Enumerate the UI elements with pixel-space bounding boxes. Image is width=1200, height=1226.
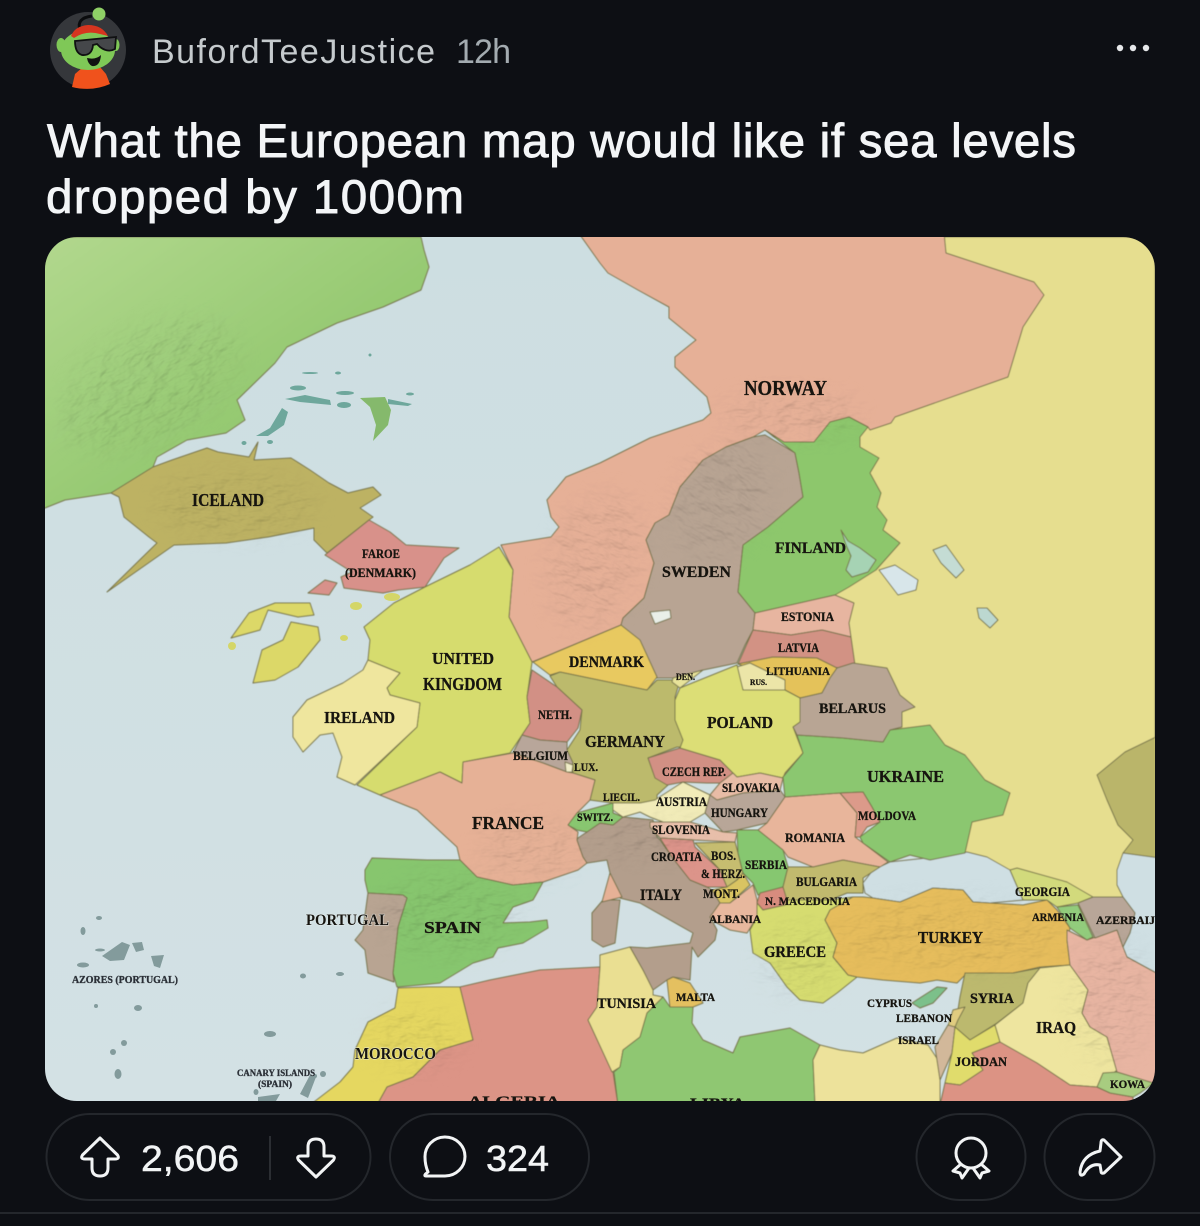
label: Turkey: TURKEY (918, 928, 983, 947)
title: What the European map would like if sea levels (47, 115, 1076, 168)
label: Switzerland: SWITZ. (577, 810, 613, 824)
islands: Arctic archipelago (242, 354, 414, 445)
label: Cyprus: CYPRUS (867, 996, 912, 1010)
country: Morocco (310, 987, 473, 1105)
label: Iraq: IRAQ (1036, 1018, 1076, 1037)
label: Slovenia: SLOVENIA (652, 822, 711, 837)
label: Sweden: SWEDEN (662, 564, 731, 581)
country: Lithuania (738, 657, 837, 698)
icon: comment bubble (425, 1137, 465, 1176)
label: Portugal: PORTUGAL (306, 912, 389, 929)
country: Poland (675, 665, 803, 778)
sea: Black Sea (863, 852, 1023, 903)
country: Austria (613, 782, 710, 822)
country: Azerbaijan (1078, 897, 1135, 947)
island: Sardinia (592, 900, 620, 947)
island: Corsica (602, 873, 622, 902)
country: Croatia (660, 838, 727, 887)
country: Lebanon (948, 1007, 965, 1027)
country: Luxembourg (565, 762, 573, 772)
country: Israel (935, 1025, 955, 1080)
icon: share arrow (1080, 1140, 1121, 1175)
country: Jordan (945, 1025, 1000, 1085)
label: Luxembourg: LUX. (574, 760, 598, 774)
label: Slovakia: SLOVAKIA (722, 780, 781, 795)
country: Saudi Arabia (940, 1042, 1133, 1105)
country: Slovakia (710, 773, 783, 800)
label: Italy: ITALY (640, 887, 682, 904)
land: Greenland (40, 237, 429, 510)
label: Albania: ALBANIA (709, 912, 761, 926)
islands: Azores (77, 916, 344, 1101)
label: Ukraine: UKRAINE (867, 767, 944, 786)
country: France (380, 753, 595, 885)
country: Serbia (737, 830, 788, 895)
map panel (40, 232, 1160, 1112)
label: Montenegro: MONT. (703, 886, 740, 901)
country: Cyprus (912, 987, 947, 1008)
island: northwest yellow (231, 603, 314, 638)
country: Kaliningrad (737, 663, 785, 690)
icon: upvote arrow (82, 1138, 118, 1176)
country: Spain (365, 858, 548, 987)
country: Iraq (995, 965, 1117, 1087)
label: Morocco: MOROCCO (355, 1044, 436, 1063)
award button (916, 1114, 1026, 1200)
label: Faroe: FAROE (362, 546, 400, 561)
label: Belarus: BELARUS (819, 701, 886, 717)
label: Norway: NORWAY (744, 376, 827, 400)
label: Netherlands: NETH. (538, 707, 572, 722)
country: Estonia (753, 595, 854, 637)
land masses (40, 232, 1160, 1105)
country: Bosnia and Herzegovina (695, 842, 743, 887)
country: Italy (577, 817, 720, 990)
country: Iceland (107, 442, 381, 592)
label: Bosnia: BOS. (711, 848, 736, 863)
label: Jordan: JORDAN (955, 1054, 1008, 1069)
icon: award ribbon (953, 1138, 989, 1178)
label: Belgium: BELGIUM (513, 748, 568, 763)
country: Algeria (377, 967, 618, 1105)
lake: Sweden (650, 610, 671, 624)
country: Egypt (813, 1038, 940, 1105)
country: Albania (710, 885, 757, 933)
label: Armenia: ARMENIA (1032, 910, 1084, 924)
country: Libya (614, 997, 820, 1105)
label: Canary Islands: CANARY ISLANDS (237, 1068, 315, 1078)
country: Moldova (840, 792, 880, 837)
country: Armenia (1057, 905, 1093, 940)
label: France: FRANCE (472, 813, 544, 833)
country: Faroe (325, 520, 459, 593)
label: Estonia: ESTONIA (781, 609, 835, 624)
country: Switzerland (568, 803, 623, 832)
label: Denmark: DENMARK (569, 654, 644, 671)
label: Algeria: ALGERIA (468, 1094, 560, 1110)
country: Finland (738, 417, 900, 613)
country: Greece (750, 897, 857, 1003)
label: Finland: FINLAND (775, 540, 846, 557)
icon: downvote arrow (298, 1139, 334, 1177)
country: Denmark islet (672, 670, 703, 688)
country: Portugal (355, 893, 407, 982)
post age: 12h (456, 33, 511, 71)
country: Latvia (738, 630, 855, 668)
label: Kuwait: KOWA (1110, 1077, 1145, 1091)
country: Malta (667, 977, 703, 1007)
country: Bulgaria (783, 860, 880, 900)
country: Belgium (513, 735, 573, 772)
country: Kuwait (1097, 1072, 1155, 1097)
username: BufordTeeJustice (152, 33, 435, 71)
label: Germany: GERMANY (585, 732, 665, 751)
sea: Caspian (1116, 852, 1155, 972)
country: United Kingdom (357, 547, 532, 795)
sea (45, 237, 1155, 1101)
country: Ireland (293, 660, 420, 785)
country: Czech Republic (648, 748, 733, 785)
label: Lebanon: LEBANON (896, 1011, 952, 1025)
label: Herzegovina: & HERZ. (701, 866, 745, 881)
label: Greece: GREECE (764, 944, 826, 961)
label: (Denmark): (DENMARK) (345, 565, 416, 580)
label: Austria: AUSTRIA (656, 794, 708, 809)
title: dropped by 1000m (46, 171, 464, 224)
label: Libya: LIBYA (690, 1096, 745, 1112)
share button (1044, 1114, 1154, 1200)
country: Kazakhstan (1097, 735, 1160, 860)
label: Kingdom: KINGDOM (423, 674, 502, 694)
country: Norway (501, 232, 1044, 662)
label: Lithuania: LITHUANIA (766, 664, 830, 678)
country: Iran (1067, 930, 1160, 1085)
icon: more menu (1117, 45, 1149, 51)
islands: small north Atlantic (228, 593, 400, 650)
country: Denmark (533, 625, 657, 690)
label: Canary Islands owner: (SPAIN) (258, 1079, 292, 1089)
title (46, 115, 1076, 224)
country: Ukraine (783, 725, 1010, 862)
label: Latvia: LATVIA (778, 640, 819, 655)
island: west yellow (253, 622, 320, 683)
island groups (77, 354, 414, 1101)
label: Malta: MALTA (676, 990, 715, 1004)
label: Israel: ISRAEL (898, 1033, 939, 1047)
country: Romania (758, 793, 888, 867)
mountain relief (40, 292, 1150, 1070)
country: Slovenia (650, 822, 737, 842)
country: Faroe islet (308, 580, 337, 595)
vote pill (46, 1114, 370, 1200)
label: Ireland: IRELAND (324, 708, 395, 727)
vote count: 2,606 (141, 1138, 239, 1179)
label: Azores: AZORES (PORTUGAL) (72, 975, 178, 986)
comment count: 324 (486, 1138, 549, 1179)
icon: user avatar (50, 8, 126, 89)
country: Tunisia (588, 947, 663, 1072)
label: Liechtenstein: LIECIL. (603, 790, 640, 804)
label: Croatia: CROATIA (651, 849, 703, 864)
label: United: UNITED (432, 649, 494, 668)
label: North Macedonia: N. MACEDONIA (765, 894, 850, 908)
country: Turkey (825, 888, 1070, 983)
country: Belarus (793, 663, 915, 742)
label: Spain: SPAIN (424, 918, 482, 937)
label: Moldova: MOLDOVA (858, 808, 917, 823)
label: Denmark islet: DEN. (676, 672, 695, 682)
lake: Finnish lakes (841, 530, 876, 577)
label: Azerbaijan: AZERBAIJ (1096, 913, 1155, 927)
country: Sweden (621, 435, 803, 678)
country: North Macedonia (757, 887, 787, 910)
country labels (72, 376, 1155, 1112)
label: Iceland: ICELAND (192, 490, 264, 510)
country: Germany (550, 672, 685, 803)
country: Georgia (1010, 868, 1093, 907)
country: Hungary (705, 790, 785, 832)
label: Serbia: SERBIA (745, 857, 788, 872)
lake: eastern Russia (977, 608, 998, 628)
label: Poland: POLAND (707, 713, 773, 732)
label: Hungary: HUNGARY (711, 805, 769, 820)
label: Georgia: GEORGIA (1015, 884, 1071, 899)
lake: Ladoga (879, 565, 918, 595)
lake: Onega (933, 545, 964, 578)
label: Syria: SYRIA (970, 991, 1014, 1007)
label: Czech Republic: CZECH REP. (662, 764, 726, 779)
country: Syria (955, 968, 1040, 1040)
country: Russia (836, 237, 1155, 897)
country: Netherlands (522, 670, 582, 742)
label: Tunisia: TUNISIA (597, 996, 656, 1012)
label: Bulgaria: BULGARIA (796, 874, 858, 889)
comments pill (390, 1114, 589, 1200)
country: Montenegro (712, 873, 750, 903)
label: Romania: ROMANIA (785, 830, 846, 845)
label: Russia exclave: RUS. (750, 678, 767, 687)
